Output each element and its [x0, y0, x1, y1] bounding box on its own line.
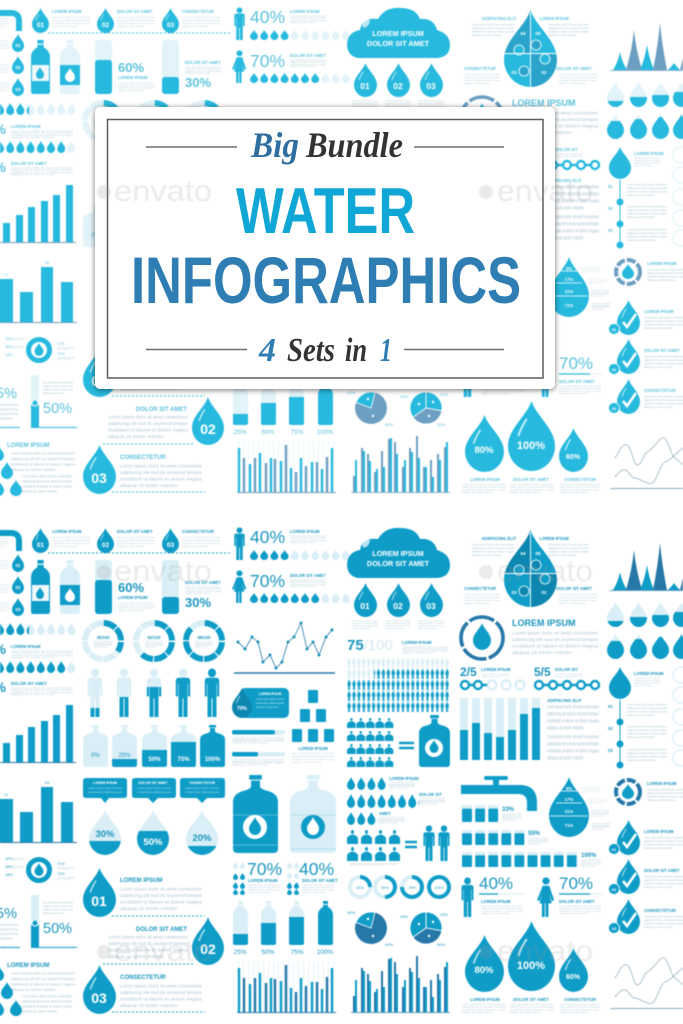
callouts pointing to percent drops: consectetur adipiscing elit: [88, 790, 122, 794]
layered drop percentages: 17%: [565, 797, 573, 802]
big percentage drops: 100%: [517, 960, 545, 972]
stat donut with drop: 18%: [5, 873, 13, 877]
callouts pointing to percent drops: LOREM IPSUM: [93, 781, 117, 785]
chain progress 2/5 and 5/5: 5/5: [534, 665, 551, 679]
pie charts: [347, 910, 448, 947]
water tubes 60% and 30%: 60%: [118, 580, 144, 595]
check mark drops: DOLOR SIT AMET: [644, 868, 680, 873]
pie charts: 60%: [385, 942, 393, 947]
faucet with glasses rows: 100%: [581, 853, 597, 859]
upper paragraph column: [460, 178, 599, 241]
upper infographic board: [0, 7, 683, 496]
bottle fill levels: 100%: [317, 949, 334, 956]
heading: WATER: WATER: [236, 174, 415, 247]
segmented donut charts: 62/100: [148, 635, 161, 640]
stacked cup pyramid: LOREM IPSUM: [298, 746, 328, 751]
ring with drop and text: [616, 780, 683, 804]
envato watermarks: envato: [114, 175, 212, 208]
upper lower-left bars: [0, 260, 77, 322]
drop timeline with steps: 02: [608, 726, 613, 731]
upper thermometer: [0, 375, 77, 428]
callouts pointing to percent drops: Lorem ipsum dolor sit amet: [185, 786, 219, 790]
small 70% and 40% drop grids: [233, 859, 338, 895]
line chart with markers: [234, 623, 335, 673]
upper people percentages: [232, 7, 370, 83]
layered drop percentages: 9%: [566, 786, 572, 791]
upper lorem text: [0, 443, 76, 496]
chain progress 2/5 and 5/5: DOLOR SIT: [555, 667, 578, 672]
stacked cup pyramid: [292, 690, 335, 764]
puzzle water drop: 04: [520, 551, 526, 556]
upper donuts: [85, 103, 222, 139]
envato watermarks: envato: [114, 555, 212, 588]
water tubes 60% and 30%: [95, 560, 222, 614]
faucet and numbered small drops: 01: [15, 563, 21, 568]
bottle fill levels: 50%: [261, 949, 275, 956]
puzzle water drop: ADIPISCING ELIT: [482, 536, 517, 541]
upper ring text: [616, 260, 683, 284]
level bars chart and paragraph: [460, 698, 599, 761]
thermometer 50%: [0, 895, 77, 948]
level bars chart and paragraph: ADIPISCING ELIT: [547, 698, 582, 703]
small progress donuts: 100%: [434, 886, 444, 890]
upper chain progress: [460, 145, 599, 170]
upper left drop rows: [0, 103, 116, 176]
drop banner with progress bars: 70%: [237, 706, 248, 712]
upper drop timeline: [608, 147, 683, 248]
callouts pointing to percent drops: CONSECTETUR: [189, 781, 215, 785]
big percentage drops: LOREM IPSUM: [470, 997, 500, 1002]
left drop rows with percentages: [0, 623, 116, 696]
upper puzzle drop: [464, 10, 598, 87]
lower left bar chart: 99: [45, 780, 50, 785]
striped bar chart: [237, 965, 336, 1012]
drop rows and people equation: DOLOR SIT: [419, 792, 442, 797]
wave line chart: [610, 958, 683, 1008]
ring with drop and text: LOREM IPSUM: [647, 781, 677, 786]
people 40% and 70% with drop rows: DOLOR SIT AMET: [290, 573, 326, 578]
water jugs 0 to 100 percent: 0%: [91, 753, 101, 759]
drop banner with progress bars: Lorem ipsum dolor sit amet: [256, 697, 284, 701]
upper numbered steps: [83, 348, 224, 494]
area peaks chart: [610, 543, 683, 590]
subtitle: Big Bundle: Bundle: [305, 125, 403, 165]
rain cloud with numbered drops: LOREM IPSUM: [372, 549, 424, 558]
callouts pointing to percent drops: 30%: [95, 829, 115, 840]
rain cloud with numbered drops: 02: [393, 601, 403, 611]
layered drop percentages: [549, 777, 610, 837]
numbered steps 01 02 03: 03: [91, 990, 107, 1006]
people 40% and 70% with drop rows: 40%: [250, 527, 285, 547]
segmented donut charts: [85, 623, 222, 659]
numbered steps 01 02 03: [83, 868, 224, 1014]
upper numbered drop row: [32, 8, 230, 33]
faucet and numbered small drops: 02: [15, 585, 21, 590]
numbered drops row with dashed rule: LOREM IPSUM: [52, 529, 82, 534]
stat donut with drop: [5, 857, 76, 880]
envato watermarks: envato: [497, 555, 593, 588]
faucet and numbered small drops: [0, 533, 24, 616]
pie charts: 30%: [347, 910, 355, 915]
puzzle water drop: 05: [535, 551, 541, 556]
person 40% and 70% callouts: 70%: [559, 874, 593, 893]
pie charts: 25%: [440, 912, 448, 917]
drop rows and people equation: AMET: [379, 811, 391, 816]
small 70% and 40% drop grids: DOLOR SIT AMET: [302, 878, 338, 883]
ring with drop and lorem ipsum heading: [461, 617, 599, 659]
upper stat donut: [5, 337, 76, 360]
drop banner with progress bars: sed do eiusmod: [256, 705, 279, 709]
upper faucet and numbered drops: [0, 13, 24, 96]
check mark drops: 02: [612, 887, 617, 892]
upper level drops: [607, 82, 683, 139]
upper jugs: [83, 205, 225, 247]
stat donut with drop: 38%: [5, 865, 13, 869]
small progress donuts: 25%: [356, 886, 364, 890]
envato watermarks: envato: [114, 935, 212, 968]
water jugs 0 to 100 percent: [83, 725, 225, 767]
stat donut with drop: 32%: [5, 857, 13, 861]
subtitle: Big Bundle: [146, 125, 504, 165]
puzzle water drop: LOREM IPSUM: [539, 536, 569, 541]
callouts pointing to percent drops: [83, 778, 225, 855]
people 40% and 70% with drop rows: LOREM IPSUM: [290, 529, 320, 534]
layered drop percentages: 71%: [565, 823, 573, 828]
lower infographic board: [0, 527, 683, 1016]
subtitle: 4 Sets in 1: 4: [258, 332, 276, 369]
bottle fill levels: 75%: [290, 949, 304, 956]
heading: INFOGRAPHICS: INFOGRAPHICS: [131, 243, 521, 317]
75 of 100 people grid: LOREM IPSUM: [402, 640, 432, 645]
chain progress 2/5 and 5/5: LOREM IPSUM: [481, 667, 511, 672]
small progress donuts: [350, 877, 449, 897]
water jugs 0 to 100 percent: 50%: [148, 757, 161, 763]
drop timeline with steps: [608, 667, 683, 768]
upper ring heading: [461, 97, 599, 139]
puzzle water drop: DOLOR SIT AMET: [556, 586, 592, 591]
numbered drops row with dashed rule: CONSECTETUR: [182, 529, 214, 534]
numbered drops row with dashed rule: [32, 528, 230, 553]
envato watermarks: envato: [497, 935, 593, 968]
person 40% and 70% callouts: 40%: [479, 874, 513, 893]
small progress donuts: 50%: [381, 886, 389, 890]
numbered steps 01 02 03: 01: [91, 893, 107, 909]
left drop rows with percentages: DOLOR SIT AMET: [11, 681, 47, 686]
water jugs 0 to 100 percent: 25%: [118, 753, 131, 759]
rising bar chart: [0, 705, 76, 762]
75 of 100 people grid: 75/100: [347, 637, 393, 654]
upper big drops: [462, 401, 601, 494]
small 70% and 40% drop grids: LOREM IPSUM: [248, 878, 278, 883]
drop rows and people equation: [347, 776, 467, 866]
pie charts: 25%: [400, 914, 408, 919]
upper twin bars: [351, 436, 450, 492]
layered drop percentages: 31%: [565, 809, 573, 814]
upper pies: [347, 390, 448, 427]
drop banner with progress bars: consectetur adipiscing elit: [256, 701, 284, 705]
ring with drop and lorem ipsum heading: LOREM IPSUM: [512, 618, 576, 628]
big percentage drops: DOLOR SIT AMET: [513, 997, 549, 1002]
water jugs 0 to 100 percent: 75%: [177, 757, 190, 763]
numbered steps 01 02 03: 02: [200, 941, 216, 957]
faucet with glasses rows: 55%: [528, 831, 541, 837]
upper person callouts: [462, 354, 603, 397]
drop timeline with steps: 03: [608, 748, 613, 753]
upper bottle levels: [233, 381, 334, 436]
drop rows and people equation: LOREM IPSUM: [389, 776, 419, 781]
person 40% and 70% callouts: [462, 874, 603, 917]
drop timeline with steps: 01: [608, 704, 613, 709]
drop banner with progress bars: [232, 688, 289, 766]
faucet with glasses rows: [461, 776, 601, 867]
upper cloud: [347, 8, 450, 110]
small 70% and 40% drop grids: 70%: [247, 859, 282, 879]
rain cloud with numbered drops: DOLOR SIT AMET: [367, 559, 430, 568]
numbered drops row with dashed rule: DOLOR SIT AMET: [117, 529, 153, 534]
subtitle: Big Bundle: Big: [250, 125, 299, 165]
puzzle water drop: 02: [541, 590, 547, 595]
subtitle: 4 Sets in 1: Sets: [287, 332, 335, 369]
numbered drops row with dashed rule: 03: [167, 542, 174, 549]
callouts pointing to percent drops: consectetur adipiscing elit: [137, 790, 171, 794]
upper striped bars: [237, 445, 336, 492]
pie charts: 50%: [437, 942, 445, 947]
callouts pointing to percent drops: Lorem ipsum dolor sit amet: [137, 786, 171, 790]
left drop rows with percentages: LOREM IPSUM: [11, 644, 41, 649]
big percentage drops: 80%: [474, 965, 494, 976]
lower left bar chart: 71: [4, 792, 9, 797]
numbered steps 01 02 03: DOLOR SIT AMET: [136, 927, 187, 933]
bottle fill levels: 25%: [233, 949, 247, 956]
thermometer 50%: 50%: [43, 921, 72, 937]
subtitle: 4 Sets in 1: [146, 332, 504, 369]
75 of 100 people grid: [347, 637, 449, 712]
callouts pointing to percent drops: consectetur adipiscing elit: [185, 790, 219, 794]
numbered steps 01 02 03: LOREM IPSUM: [120, 878, 162, 884]
chain progress 2/5 and 5/5: 2/5: [460, 665, 477, 679]
stat donut with drop: 72%: [57, 872, 65, 876]
small progress donuts: 75%: [408, 886, 416, 890]
check mark drops: 03: [612, 926, 617, 931]
upper check drops: [608, 300, 683, 414]
drops with rising levels: [607, 602, 683, 659]
small 70% and 40% drop grids: 40%: [299, 859, 334, 879]
person 40% and 70% callouts: DOLOR SIT AMET: [559, 899, 595, 904]
envato watermarks: [97, 175, 593, 968]
people 40% and 70% with drop rows: [232, 527, 370, 603]
upper layered drop: [549, 257, 610, 317]
title card: [95, 107, 555, 389]
upper bottles: [31, 40, 80, 94]
numbered drops row with dashed rule: 02: [102, 542, 109, 549]
faucet and numbered small drops: 03: [15, 607, 21, 612]
check mark drops: LOREM IPSUM: [644, 829, 674, 834]
check mark drops: CONSECTETUR: [644, 908, 676, 913]
water tubes 60% and 30%: LOREM IPSUM: [118, 595, 148, 600]
check mark drops: [608, 820, 683, 934]
upper area peaks: [610, 23, 683, 70]
lorem ipsum text with drops: [0, 963, 76, 1016]
envato watermarks: envato: [497, 175, 593, 208]
stat donut with drop: 71%: [57, 862, 65, 866]
segmented donut charts: 88/100: [198, 635, 211, 640]
drop banner with progress bars: LOREM IPSUM: [259, 692, 282, 696]
rain cloud with numbered drops: 03: [426, 601, 436, 611]
water tubes 60% and 30%: 30%: [185, 595, 211, 610]
water tubes 60% and 30%: DOLOR SIT AMET: [185, 580, 221, 585]
upper wave chart: [610, 438, 683, 488]
rain cloud with numbered drops: [347, 528, 450, 630]
lower left bar chart: [0, 780, 77, 842]
person 40% and 70% callouts: LOREM IPSUM: [481, 899, 511, 904]
callouts pointing to percent drops: 20%: [192, 833, 212, 844]
numbered steps 01 02 03: CONSECTETUR: [120, 975, 166, 981]
bottles with drop labels: [31, 560, 80, 614]
chain progress 2/5 and 5/5: [460, 665, 599, 690]
segmented donut charts: 35/100: [97, 635, 110, 640]
puzzle water drop: 03: [511, 590, 517, 595]
numbered drops row with dashed rule: 01: [37, 542, 44, 549]
drop timeline with steps: LOREM IPSUM: [634, 671, 664, 676]
upper rising bars: [0, 185, 76, 242]
check mark drops: 01: [612, 847, 617, 852]
people row filled from light to dark: [86, 668, 219, 717]
subtitle: 4 Sets in 1: 1: [380, 332, 392, 369]
puzzle water drop: CONSECTETUR: [464, 586, 496, 591]
containers equal one large jug: [347, 715, 450, 767]
callouts pointing to percent drops: 50%: [143, 837, 163, 848]
people 40% and 70% with drop rows: 70%: [250, 571, 285, 591]
lorem ipsum text with drops: LOREM IPSUM: [7, 963, 49, 969]
big percentage drops: CONSECTETUR: [564, 997, 596, 1002]
callouts pointing to percent drops: DOLOR SIT AMET: [139, 781, 168, 785]
dense twin bar chart: [351, 956, 450, 1012]
rain cloud with numbered drops: 01: [360, 601, 370, 611]
large water cooler bottles: [233, 775, 336, 853]
subtitle: 4 Sets in 1: in: [345, 332, 367, 369]
bottle fill levels: [233, 901, 334, 956]
faucet with glasses rows: 33%: [502, 807, 515, 813]
callouts pointing to percent drops: Lorem ipsum dolor sit amet: [88, 786, 122, 790]
puzzle water drop: [464, 530, 598, 607]
big percentage drops: [462, 921, 601, 1014]
water jugs 0 to 100 percent: 100%: [205, 757, 221, 763]
upper tubes: [95, 40, 222, 94]
big percentage drops: 60%: [566, 974, 581, 981]
upper donut row: [350, 357, 449, 377]
